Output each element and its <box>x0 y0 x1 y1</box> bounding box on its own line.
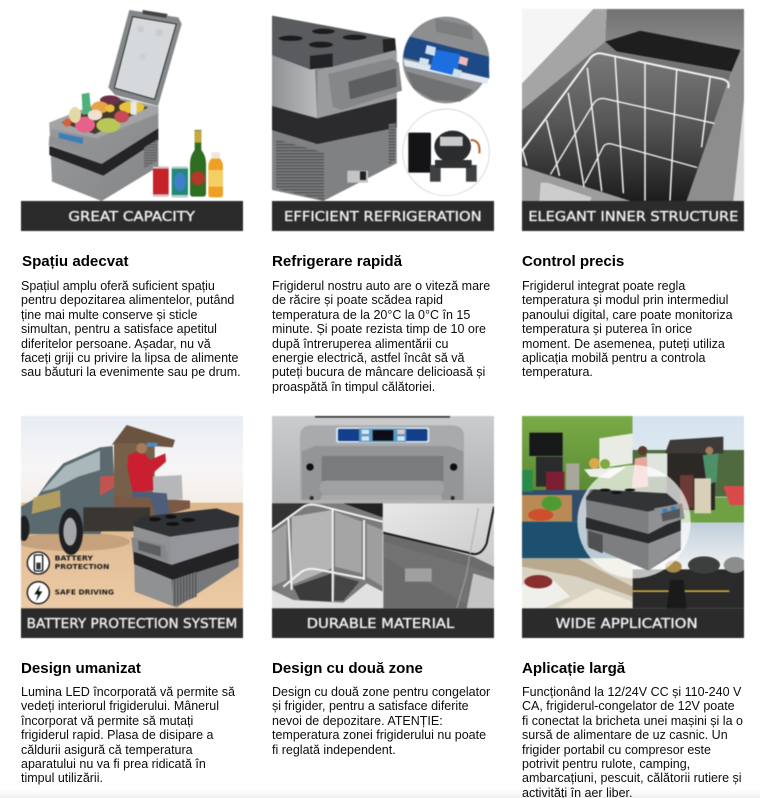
right rim <box>687 48 744 201</box>
icon: battery <box>27 552 49 574</box>
text block: design umanizat: aparatului nu va fi prea ridicată în <box>21 757 206 771</box>
text block: aplicatie larga <box>522 685 743 798</box>
heading: design umanizat: Design umanizat <box>21 660 141 677</box>
panel: wide application image <box>521 415 745 639</box>
icon: fridge close-up <box>272 16 402 201</box>
sky <box>21 416 243 503</box>
banner: battery protection system <box>21 608 243 638</box>
banner: great capacity: GREAT CAPACITY <box>68 209 196 225</box>
text block: aplicatie larga: CA, frigiderul-congelator de 12V poate <box>522 699 735 713</box>
text block: design umanizat: frigiderul rapid. Plasa de disipare a <box>21 728 213 742</box>
text block: design umanizat: vedeți interiorul frigiderului. Mânerul <box>21 699 219 713</box>
banner: elegant inner structure <box>522 201 744 231</box>
ground shadow <box>17 532 130 551</box>
icon: open lid <box>108 10 182 106</box>
text block: control precis: temperatura și modul prin intermediul <box>522 293 728 307</box>
back wall <box>605 9 744 50</box>
text block: refrigerare rapida: proaspătă în timpul călătoriei. <box>272 380 435 394</box>
highlight circle <box>577 465 691 578</box>
heading: spatiu adecvat: Spațiu adecvat <box>22 253 129 270</box>
text block: refrigerare rapida: după întreruperea alimentării cu <box>272 337 448 351</box>
icon: juice bottle <box>208 152 223 197</box>
front rim with handle <box>522 167 631 201</box>
panel: efficient refrigeration image <box>271 15 495 232</box>
left rim <box>522 9 607 110</box>
heading: design cu doua zone: Design cu două zone <box>272 660 423 677</box>
boat photo <box>522 522 633 608</box>
heading: refrigerare rapida: Refrigerare rapidă <box>272 253 402 270</box>
text block: design umanizat: căldurii asigură că temperatura <box>21 743 193 757</box>
icon: fridge body <box>49 97 158 201</box>
text block: aplicatie larga: frigider portabil cu compresor este <box>522 743 711 757</box>
text block: aplicatie larga: potrivit pentru rulote, camping, <box>522 757 690 771</box>
text block: refrigerare rapida: Frigiderul nostru auto are o viteză mare <box>272 279 490 293</box>
banner: great capacity <box>21 201 243 231</box>
text block: spatiu adecvat: sau băuturi la evenimente sau pe drum. <box>21 365 241 379</box>
banner: wide application: WIDE APPLICATION <box>556 616 698 632</box>
text block: aplicatie larga: fi conectat la bricheta unei mașini și la o <box>522 714 743 728</box>
text block: spatiu adecvat: pentru depozitarea alimentelor, putând <box>21 293 234 307</box>
interior walls <box>522 42 732 201</box>
heading: aplicatie larga: Aplicație largă <box>522 660 625 677</box>
text block: spatiu adecvat: diferitelor persoane. Așadar, nu vă <box>21 337 211 351</box>
icon: vehicle <box>19 425 190 555</box>
text block: aplicatie larga: ambarcațiuni, pescuit, călătorii rutiere și <box>522 771 742 785</box>
panel: great capacity image <box>20 9 244 232</box>
banner: battery protection system: BATTERY PROTECTION SYSTEM <box>27 616 237 632</box>
heading: control precis: Control precis <box>522 253 624 270</box>
text block: refrigerare rapida: minute. Și poate rezista timp de 10 ore <box>272 322 486 336</box>
text block: design cu doua zone <box>272 685 490 757</box>
text block: design umanizat: timpul utilizării. <box>21 771 103 785</box>
icon: lightning <box>27 582 49 604</box>
icon: control panel <box>336 427 429 443</box>
text block: refrigerare rapida: temperatura de la 20°C la 0°C în 15 <box>272 308 470 322</box>
family photo <box>632 416 744 523</box>
icon: wire basket <box>523 53 729 200</box>
text block: refrigerare rapida: energie electrică, astfel încât să vă <box>272 351 464 365</box>
text block: design umanizat <box>20 685 235 785</box>
banner: efficient refrigeration: EFFICIENT REFRIGERATION <box>284 209 482 225</box>
text block: control precis: moment. De asemenea, puteți utiliza <box>522 337 725 351</box>
panel: battery protection system image <box>20 416 244 639</box>
icon: digital panel circle <box>403 17 489 103</box>
icon: red can <box>153 167 169 197</box>
text block: spatiu adecvat: ține mai multe conserve și sticle <box>21 308 197 322</box>
text block: control precis <box>522 279 733 379</box>
icon: compressor circle <box>403 109 489 196</box>
text block: refrigerare rapida: puteți bucura de mâncare delicioasă și <box>272 365 485 379</box>
label: battery protection <box>55 555 109 571</box>
picnic photo <box>522 416 633 522</box>
icon: textured interior <box>272 503 383 608</box>
sand <box>21 503 243 609</box>
text block: design cu doua zone: temperatura zonei frigiderului nu poate <box>272 728 486 742</box>
upper left surface <box>522 9 593 83</box>
text block: spatiu adecvat: faceți griji cu privire la lipsa de alimente <box>21 351 238 365</box>
text block: aplicatie larga: sursă de alimentare de uz casnic. Un <box>522 728 728 742</box>
banner: durable material <box>272 608 494 638</box>
banner: efficient refrigeration <box>272 201 494 231</box>
handle section <box>272 416 494 503</box>
text block: design umanizat: încorporat vă permite să mutați <box>21 714 193 728</box>
text block: control precis: aplicația mobilă pentru a controla <box>522 351 705 365</box>
text block: control precis: temperatura și puterea în orice <box>522 322 692 336</box>
text block: refrigerare rapida: de răcire și poate scădea rapid <box>272 293 443 307</box>
text block: spatiu adecvat: Spațiul amplu oferă suficient spațiu <box>21 279 215 293</box>
panel: elegant inner structure image <box>521 8 745 232</box>
banner: elegant inner structure: ELEGANT INNER STRUCTURE <box>528 209 738 225</box>
icon: food in fridge <box>63 93 144 133</box>
text block: refrigerare rapida <box>272 279 490 394</box>
text block: design cu doua zone: fi reglată independent. <box>272 743 396 757</box>
banner: wide application <box>522 608 744 638</box>
text block: design cu doua zone: nevoi de depozitare. ATENȚIE: <box>272 714 443 728</box>
text block: control precis: temperatura. <box>522 365 593 379</box>
label: battery protection: PROTECTION <box>55 563 109 571</box>
text block: design cu doua zone: și frigider, pentru a satisface diferite <box>272 699 469 713</box>
text block: control precis: Frigiderul integrat poate regla <box>522 279 685 293</box>
text block: aplicatie larga: Funcționând la 12/24V CC și 110-240 V <box>522 685 741 699</box>
text block: spatiu adecvat <box>21 279 241 379</box>
panel: durable material image <box>271 415 495 639</box>
icon: cooler <box>131 508 239 607</box>
text block: control precis: panoului digital, care poate monitoriza <box>522 308 733 322</box>
label: battery protection: BATTERY <box>55 555 94 563</box>
icon: lid and chain <box>383 503 494 608</box>
icon: man in red jacket <box>127 443 169 517</box>
label: safe driving: SAFE DRIVING <box>55 588 114 596</box>
text block: spatiu adecvat: simultan, pentru a satisface apetitul <box>21 322 217 336</box>
icon: fridge <box>586 489 685 571</box>
road photo <box>633 523 746 608</box>
icon: blue green can <box>172 167 188 197</box>
text block: design cu doua zone: Design cu două zone pentru congelator <box>272 685 490 699</box>
dark compartment <box>605 31 741 72</box>
text block: design umanizat: Lumina LED încorporată vă permite să <box>21 685 235 699</box>
icon: green bottle <box>190 130 206 197</box>
banner: durable material: DURABLE MATERIAL <box>307 616 455 632</box>
